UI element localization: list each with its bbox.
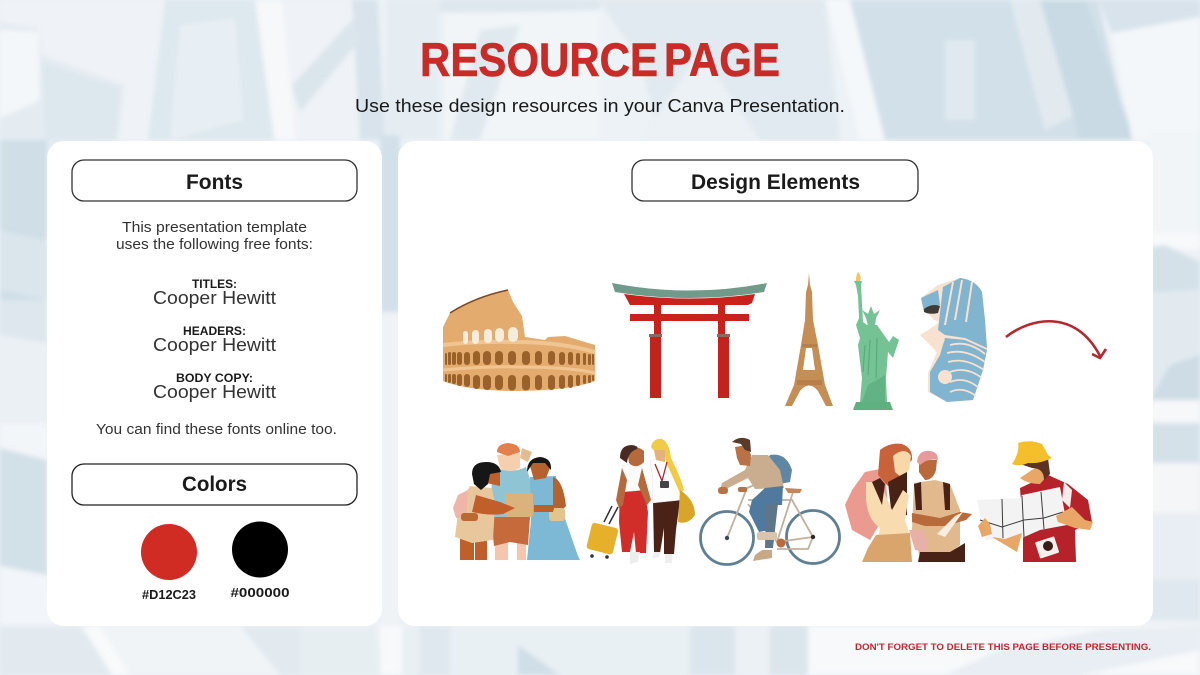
panel: fonts and colors [47, 141, 382, 626]
heading: Fonts [72, 160, 357, 201]
heading: Colors: Colors [182, 473, 247, 496]
title: PAGE [664, 33, 780, 86]
color swatch: black [230, 522, 290, 600]
icon: colosseum [443, 290, 595, 391]
icon: statue of liberty [853, 272, 899, 410]
footer note: DON'T FORGET TO DELETE THIS PAGE BEFORE PRESENTING. [855, 642, 1151, 653]
panel: design elements [398, 141, 1153, 626]
text block: headers font [153, 324, 276, 355]
text block: body copy font: Cooper Hewitt [153, 382, 276, 402]
color swatch: red: #D12C23 [142, 588, 196, 602]
title: RESOURCE [420, 33, 658, 86]
color swatch: red [141, 524, 197, 602]
icon: eiffel tower [785, 273, 833, 406]
text block: intro: This presentation template [122, 220, 307, 236]
text block: body copy font [153, 371, 276, 402]
color swatch: black: #000000 [230, 586, 290, 600]
illustration: cyclist [700, 438, 840, 564]
heading: Colors [72, 464, 357, 505]
text block: headers font: Cooper Hewitt [153, 335, 276, 355]
heading: Fonts: Fonts [186, 171, 243, 194]
text block: intro [116, 220, 313, 253]
text block: titles font: TITLES: [192, 277, 237, 291]
text block: body copy font: BODY COPY: [176, 371, 253, 385]
heading: Design Elements [632, 160, 918, 201]
heading: Design Elements: Design Elements [691, 171, 860, 194]
text block: headers font: HEADERS: [183, 324, 246, 338]
illustration: two hikers [845, 444, 972, 562]
arrow: curved red [1006, 321, 1106, 358]
subtitle: Use these design resources in your Canva Presentation. [355, 95, 845, 116]
illustration: couple with suitcase [586, 439, 695, 564]
text block: fonts online note: You can find these fonts online too. [96, 421, 337, 438]
icon: merlion [920, 278, 987, 402]
illustration: man reading map [977, 441, 1093, 562]
text block: titles font: Cooper Hewitt [153, 288, 276, 308]
text block: titles font [153, 277, 276, 308]
text block: intro: uses the following free fonts: [116, 237, 313, 253]
icon: torii gate [612, 283, 767, 398]
illustration: group of three tourists [453, 443, 580, 560]
